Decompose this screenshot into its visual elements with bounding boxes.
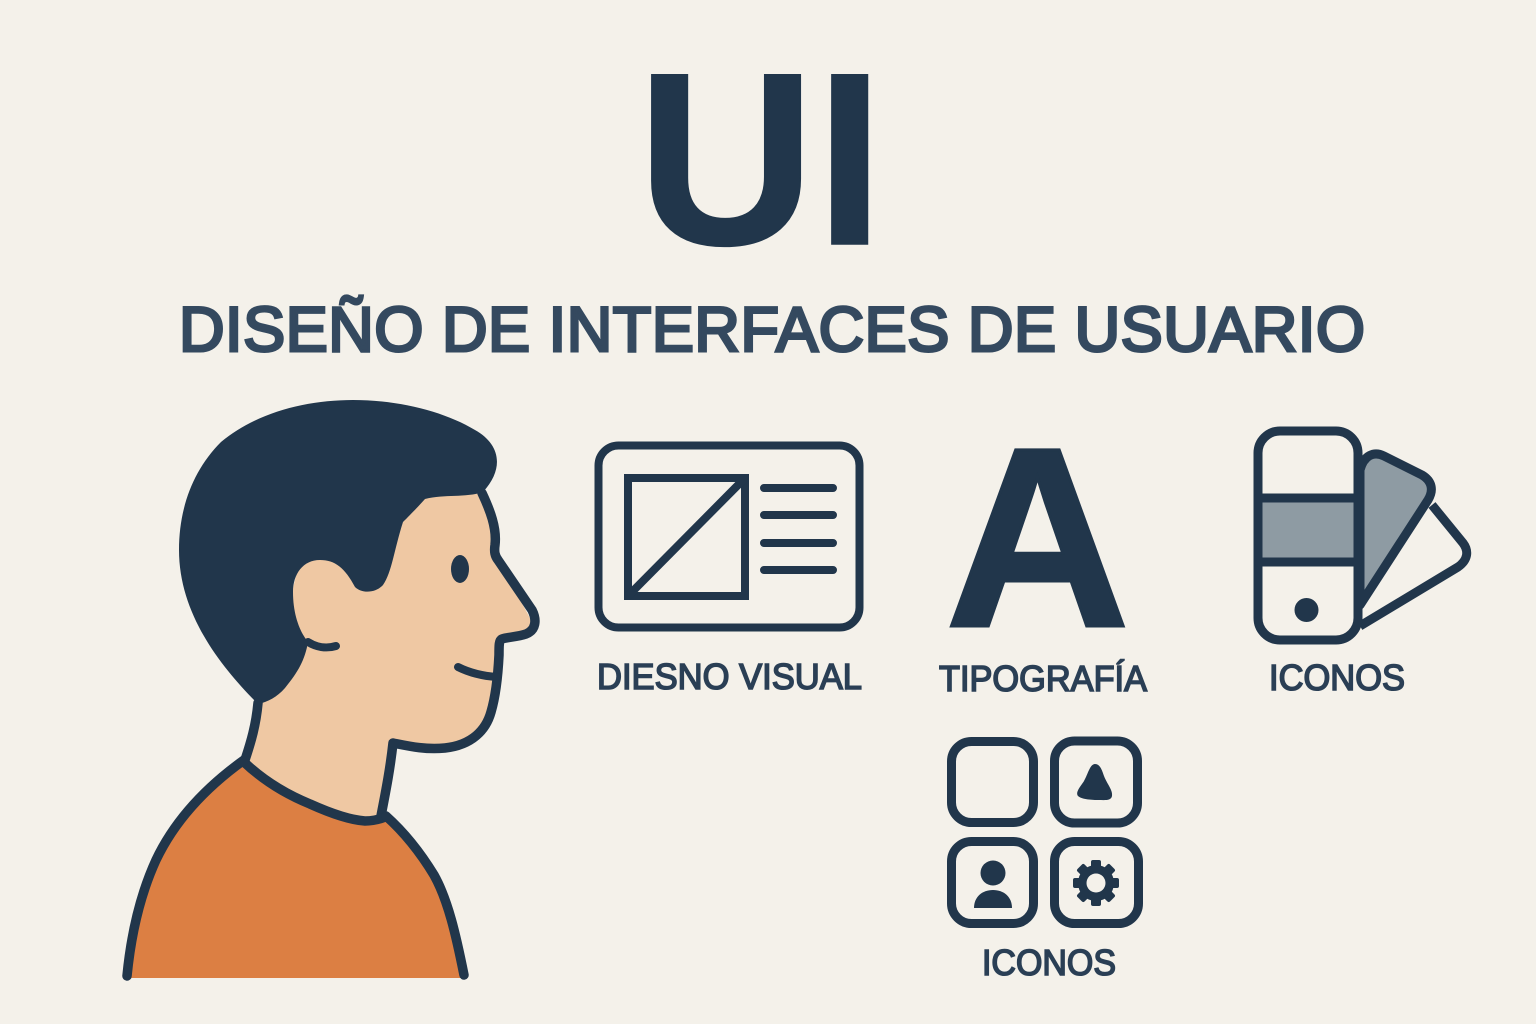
back swatch [1360, 505, 1467, 626]
icon: colour swatches [1258, 431, 1467, 640]
gear tile [1054, 842, 1138, 924]
label: visual design: DIESNO VISUAL [597, 656, 862, 697]
eye [451, 555, 469, 583]
left shoulder line [127, 760, 244, 976]
empty tile [952, 742, 1034, 822]
skin: face and neck [247, 480, 533, 819]
neck back line [245, 703, 258, 760]
hair [179, 400, 497, 704]
face profile line [381, 493, 535, 816]
person illustration [127, 400, 535, 978]
bell tile [1054, 741, 1138, 823]
label: typography: TIPOGRAFÍA [939, 658, 1147, 699]
icon: typography letter: A [945, 395, 1130, 681]
grey band [1258, 498, 1358, 562]
icon: visual design card [598, 446, 860, 628]
shirt [127, 762, 463, 978]
user tile [952, 842, 1034, 924]
middle swatch [1360, 454, 1431, 605]
label: swatches: ICONOS [1269, 657, 1405, 698]
label: icons: ICONOS [982, 942, 1116, 983]
subtitle: DISEÑO DE INTERFACES DE USUARIO [179, 295, 1365, 365]
ear line [308, 642, 336, 647]
front swatch [1258, 431, 1358, 640]
title: UI [637, 22, 884, 297]
right shoulder line [386, 816, 464, 975]
collar line [244, 762, 385, 821]
icon grid [952, 741, 1138, 924]
smile [458, 667, 497, 677]
